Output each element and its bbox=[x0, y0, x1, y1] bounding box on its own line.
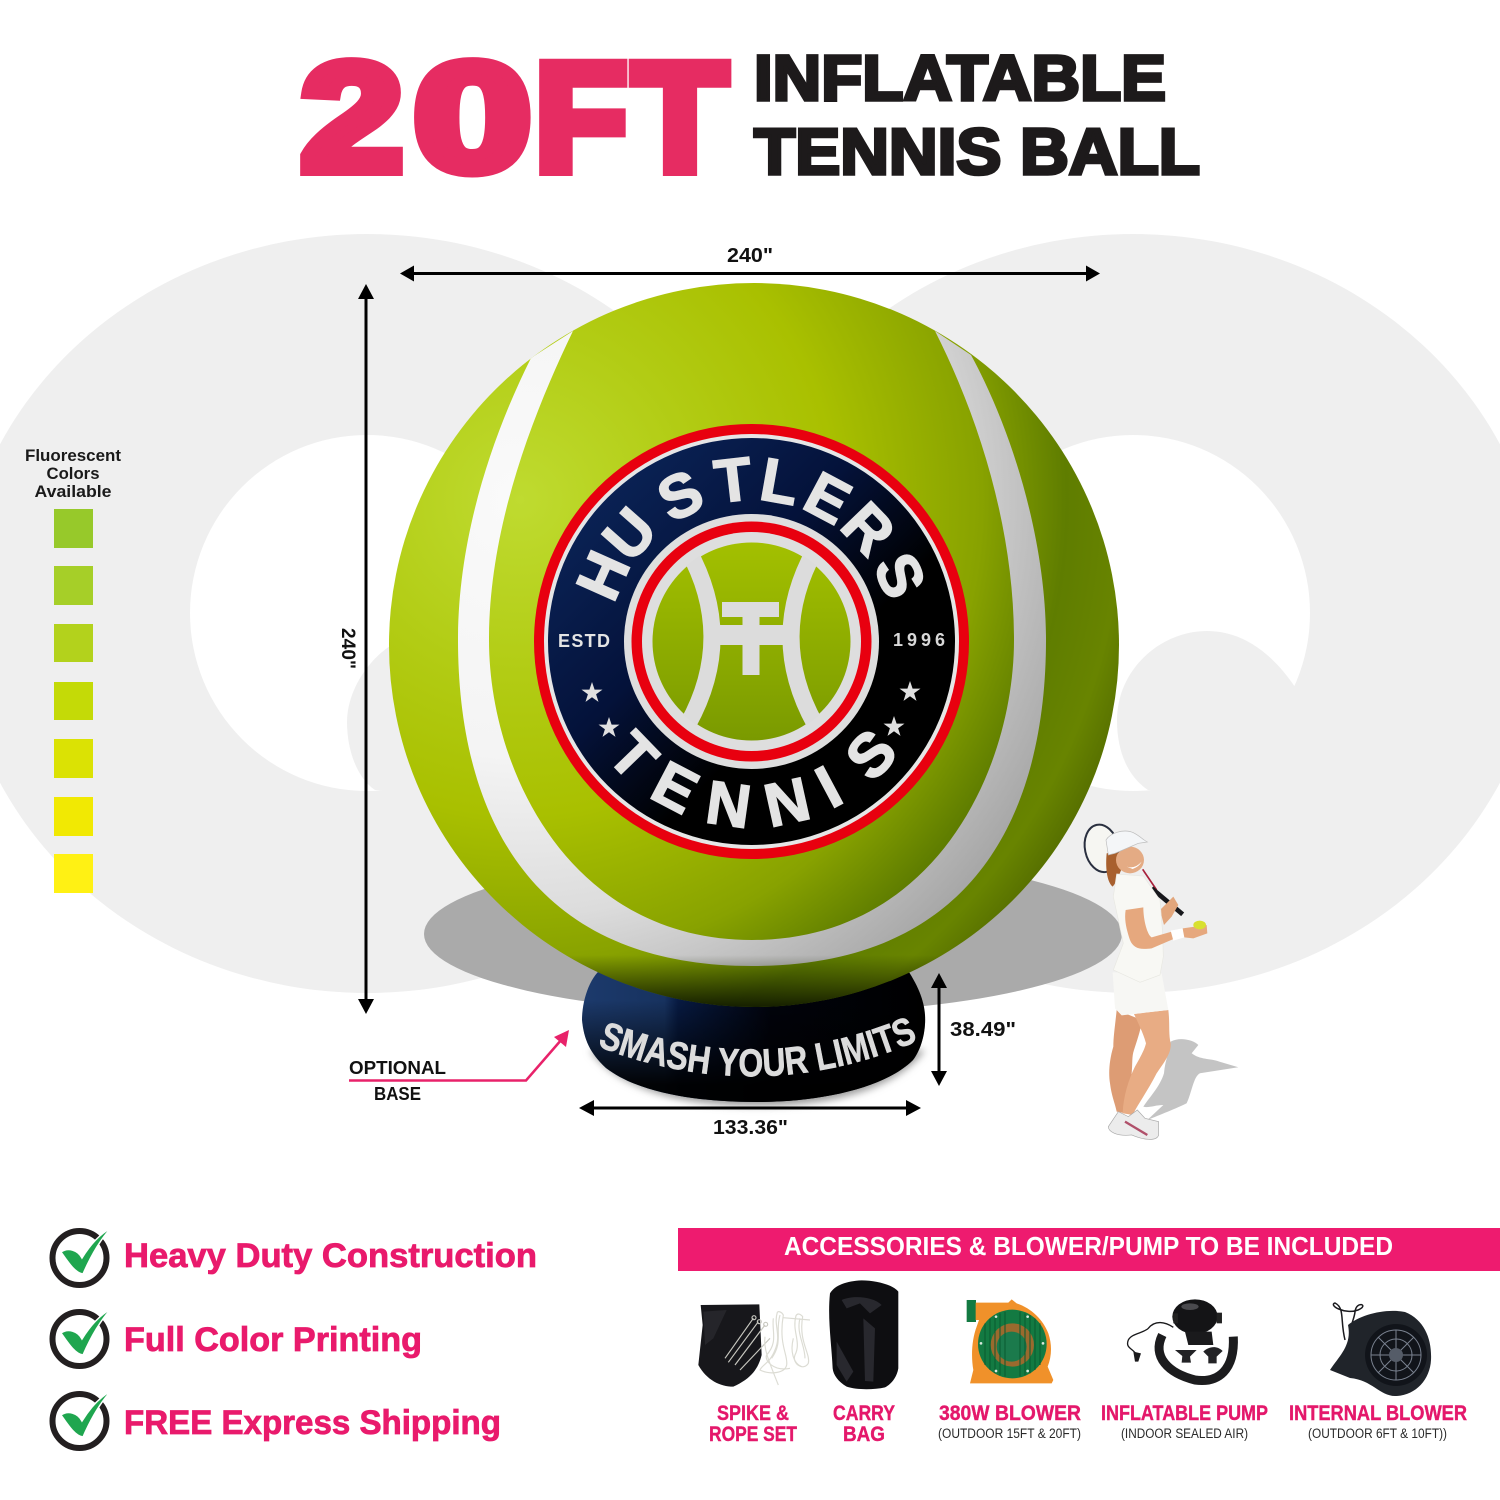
logo: HUSTLERS: R bbox=[829, 489, 908, 568]
accessories bbox=[698, 1280, 1467, 1446]
feature: heavy duty construction bbox=[52, 1228, 537, 1285]
legend heading bbox=[25, 446, 121, 501]
logo: HUSTLERS: L bbox=[755, 445, 804, 518]
check icon bbox=[52, 1228, 111, 1285]
title: 20FT: F bbox=[535, 32, 627, 203]
accessories banner bbox=[678, 1228, 1500, 1271]
accessory labels: SPIKE & bbox=[717, 1402, 789, 1425]
title: 20FT: 2 bbox=[301, 32, 403, 203]
title: 20FT: T bbox=[633, 32, 727, 203]
dimension: base height arrow: 38.49" bbox=[950, 1019, 1016, 1041]
dimension: height arrow: 240" bbox=[337, 628, 358, 669]
logo: TENNIS: N bbox=[702, 768, 755, 841]
logo monogram bbox=[688, 550, 815, 724]
optional base callout: OPTIONAL bbox=[349, 1057, 446, 1078]
accessory: spike and rope set bbox=[698, 1304, 810, 1387]
feature: full color printing: Full Color Printing bbox=[124, 1321, 422, 1359]
tennis ball bbox=[389, 283, 1119, 1007]
logo: TENNIS bbox=[596, 716, 910, 841]
accessory labels: INTERNAL BLOWER bbox=[1289, 1402, 1467, 1425]
front arm bbox=[1125, 907, 1175, 949]
racket bbox=[1080, 821, 1183, 914]
logo: TENNIS: E bbox=[642, 748, 709, 827]
feature: free express shipping: FREE Express Shipping bbox=[124, 1404, 501, 1442]
white seam band bbox=[458, 331, 1046, 966]
accessories banner: ACCESSORIES & BLOWER/PUMP TO BE INCLUDED bbox=[784, 1231, 1393, 1261]
title: inflatable: INFLATABLE bbox=[754, 42, 1166, 114]
skirt bbox=[1113, 972, 1168, 1015]
logo: TENNIS: I bbox=[805, 753, 852, 821]
logo: HUSTLERS: E bbox=[794, 458, 862, 538]
logo: 1996: 1996 bbox=[893, 630, 945, 650]
feature: heavy duty construction: Heavy Duty Construction bbox=[124, 1237, 537, 1275]
optional base callout: BASE bbox=[374, 1083, 421, 1104]
dimension: base height arrow bbox=[931, 973, 1016, 1086]
logo: HUSTLERS: H bbox=[563, 541, 643, 609]
feature: full color printing bbox=[52, 1309, 422, 1366]
accessory sublabels: (INDOOR SEALED AIR) bbox=[1121, 1426, 1248, 1441]
ground shadow bbox=[424, 854, 1122, 1014]
title: 20FT: 0 bbox=[414, 32, 531, 203]
background rings bbox=[0, 234, 1500, 993]
logo: HUSTLERS: S bbox=[861, 543, 939, 608]
dimension: height arrow bbox=[337, 284, 374, 1014]
logo: TENNIS: T bbox=[596, 719, 671, 793]
inflatable base bbox=[582, 972, 927, 1111]
player shadow bbox=[1143, 1039, 1238, 1120]
check icon bbox=[52, 1391, 111, 1448]
dimension: base width arrow bbox=[579, 1100, 921, 1139]
accessory labels bbox=[709, 1402, 1467, 1446]
accessory sublabels: (OUTDOOR 6FT & 10FT)) bbox=[1308, 1426, 1447, 1441]
legs bbox=[1109, 1010, 1142, 1113]
accessory labels: INFLATABLE PUMP bbox=[1101, 1402, 1268, 1425]
dimension: width arrow bbox=[400, 245, 1100, 282]
logo stars bbox=[582, 681, 920, 737]
face bbox=[1116, 847, 1144, 873]
cap bbox=[1106, 831, 1147, 855]
accessory labels: ROPE SET bbox=[709, 1423, 797, 1446]
accessory labels: BAG bbox=[843, 1423, 885, 1446]
dimension: width arrow: 240" bbox=[727, 245, 773, 267]
logo: HUSTLERS: T bbox=[711, 444, 755, 516]
logo: TENNIS: S bbox=[832, 716, 910, 793]
accessory: inflatable pump bbox=[1128, 1299, 1233, 1380]
logo bbox=[534, 424, 969, 859]
accessory labels: CARRY bbox=[833, 1402, 895, 1425]
base slogan: SMASH YOUR LIMITS bbox=[600, 1018, 916, 1077]
legend heading: Available bbox=[34, 482, 112, 501]
color swatches bbox=[54, 509, 93, 893]
title: 20FT bbox=[301, 32, 727, 203]
legend heading: Fluorescent bbox=[25, 446, 121, 465]
legend heading: Colors bbox=[46, 464, 100, 483]
hair bbox=[1106, 850, 1123, 887]
check icon bbox=[52, 1309, 111, 1366]
tennis player bbox=[1080, 821, 1238, 1139]
accessory labels: 380W BLOWER bbox=[939, 1402, 1081, 1425]
tennis ball in hand bbox=[1193, 921, 1206, 929]
optional base callout bbox=[349, 1030, 569, 1104]
logo: TENNIS: N bbox=[758, 764, 816, 840]
back arm bbox=[1160, 897, 1178, 925]
logo: HUSTLERS: U bbox=[590, 495, 670, 573]
title bbox=[301, 32, 1200, 203]
title: tennis ball: TENNIS BALL bbox=[754, 115, 1200, 188]
accessory sublabels: (OUTDOOR 15FT & 20FT) bbox=[938, 1426, 1081, 1441]
feature: free express shipping bbox=[52, 1391, 501, 1448]
accessory: internal blower bbox=[1330, 1303, 1431, 1396]
accessory sublabels bbox=[938, 1426, 1447, 1441]
logo: HUSTLERS bbox=[563, 444, 939, 609]
dimension: base width arrow: 133.36" bbox=[713, 1117, 788, 1139]
feature list bbox=[52, 1228, 537, 1448]
logo: ESTD: ESTD bbox=[558, 631, 610, 651]
color legend bbox=[25, 446, 121, 893]
accessory: 380W blower bbox=[967, 1299, 1053, 1383]
accessory: carry bag bbox=[829, 1280, 898, 1389]
logo: HUSTLERS: S bbox=[647, 456, 713, 535]
shirt bbox=[1113, 874, 1163, 982]
shoes bbox=[1108, 1110, 1159, 1139]
